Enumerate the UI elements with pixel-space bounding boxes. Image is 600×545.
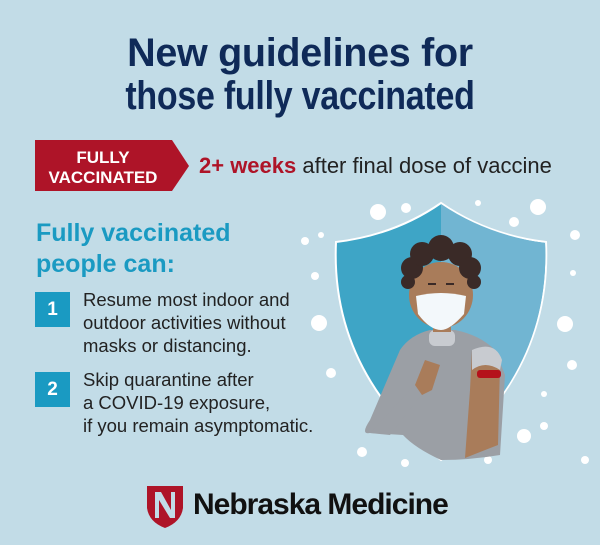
number badge 1 — [35, 292, 70, 327]
item 2 — [35, 369, 313, 436]
banner: fully vaccinated: FULLY — [76, 148, 130, 167]
heading: fully vaccinated people can: Fully vaccinated — [36, 219, 231, 247]
item 2 text: a COVID-19 exposure, — [83, 392, 270, 413]
number badge 2: 2 — [47, 379, 58, 400]
item 2 text: Skip quarantine after — [83, 369, 254, 390]
logo mark — [147, 486, 183, 528]
logo: Nebraska Medicine — [147, 486, 448, 528]
heading: fully vaccinated people can: people can: — [36, 250, 175, 278]
item 1 text: outdoor activities without — [83, 312, 286, 333]
item 1 text: Resume most indoor and — [83, 289, 290, 310]
item 2 text: if you remain asymptomatic. — [83, 415, 313, 436]
number badge 2 — [35, 372, 70, 407]
item 1 text: masks or distancing. — [83, 335, 252, 356]
title — [125, 31, 475, 118]
virus particles — [301, 199, 589, 467]
banner: fully vaccinated — [35, 140, 189, 191]
heading: fully vaccinated people can — [36, 219, 231, 278]
title: those fully vaccinated — [125, 74, 475, 118]
title: New guidelines for — [127, 31, 473, 75]
illustration: shield with vaccinated person — [301, 199, 589, 467]
item 1 text — [83, 289, 290, 356]
person — [365, 235, 505, 460]
banner: fully vaccinated: VACCINATED — [49, 168, 157, 187]
number badge 1: 1 — [47, 299, 58, 320]
item 1 — [35, 289, 290, 356]
item 2 text — [83, 369, 313, 436]
logo text: Nebraska Medicine — [193, 488, 448, 521]
shield — [336, 203, 546, 460]
subtitle: weeks after dose: 2+ weeks after final dose of vaccine — [199, 153, 552, 178]
